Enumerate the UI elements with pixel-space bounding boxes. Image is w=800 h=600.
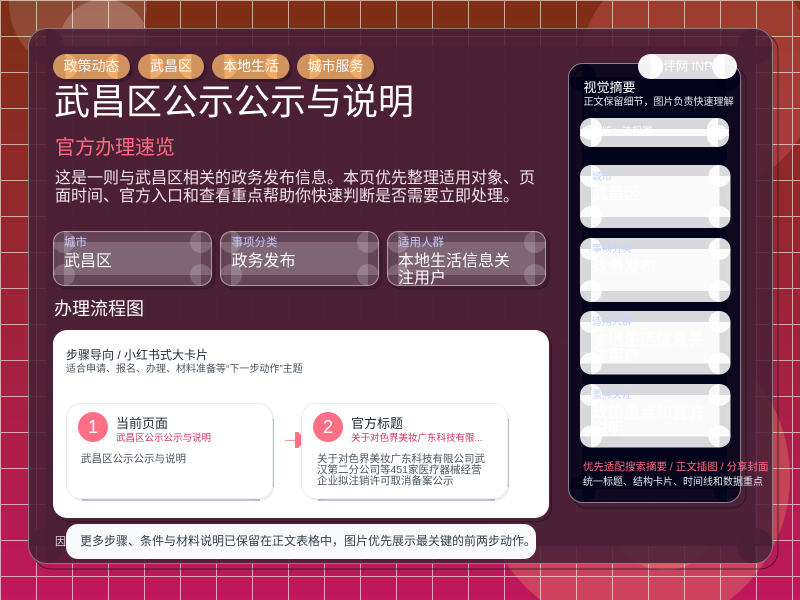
step card 1: 武昌区公示公示与说明 <box>116 432 211 444</box>
side footer accent: 优先适配搜索摘要 / 正文插图 / 分享封面 <box>583 460 769 473</box>
step card 2: 关于对色界美妆广东科技有限公司武 <box>317 452 485 465</box>
step card 1: 当前页面 <box>116 416 168 431</box>
arrow between steps <box>285 432 302 448</box>
side card: 适用人群: 适用人群 <box>592 315 632 328</box>
metric card: 事项分类: 政务发布 <box>232 252 296 270</box>
title: 武昌区公示公示与说明 <box>54 81 414 122</box>
side panel <box>568 63 769 508</box>
side card: 城市: 武昌区 <box>592 185 640 203</box>
note pill: 更多步骤、条件与材料说明已保留在正文表格中，图片优先展示最关键的前两步动作。 <box>80 533 536 548</box>
side card: 事项分类: 政务发布 <box>592 258 656 276</box>
metric card: 事项分类 <box>220 231 382 289</box>
tag: 政策动态: 政策动态 <box>64 58 120 74</box>
intro text <box>55 169 535 205</box>
step card 2 <box>302 404 509 501</box>
step number 2 <box>313 412 343 442</box>
side card: 重点关注: 说明 <box>592 420 624 438</box>
metric card: 适用人群: 注用户 <box>398 269 446 287</box>
side card: template <box>580 118 729 147</box>
metric card: 事项分类: 事项分类 <box>232 235 278 249</box>
metric card: 适用人群: 适用人群 <box>398 235 444 249</box>
metric card: 适用人群: 本地生活信息关 <box>398 252 510 270</box>
step card 2: 官方标题 <box>351 416 403 431</box>
tag: 本地生活: 本地生活 <box>223 58 279 74</box>
step number 2: 2 <box>323 417 333 437</box>
tag: 武昌区 <box>138 54 207 82</box>
tag: 城市服务: 城市服务 <box>308 58 364 74</box>
source pill <box>638 54 737 79</box>
side card: 城市: 城市 <box>592 170 612 183</box>
tags row <box>53 54 377 82</box>
side card: 适用人群: 本地生活信息关 <box>592 331 704 349</box>
step number 1: 1 <box>88 417 98 437</box>
side card: 重点关注 <box>580 384 730 448</box>
side card: template: 模版：流程图 <box>592 125 652 138</box>
flow panel <box>53 330 552 522</box>
metric card: 城市: 武昌区 <box>64 252 112 270</box>
intro text: 面时间、官方入口和查看重点帮助你快速判断是否需要立即处理。 <box>55 187 519 205</box>
side footer text: 统一标题、结构卡片、时间线和数据重点 <box>583 475 763 488</box>
subtitle: 官方办理速览 <box>55 136 175 159</box>
side card: 重点关注: 重点关注 <box>592 388 632 401</box>
side card: 适用人群: 注用户 <box>592 347 640 365</box>
step card 1: 武昌区公示公示与说明 <box>81 452 186 465</box>
side description: 正文保留细节，图片负责快速理解 <box>584 95 734 108</box>
step card 2: 汉第二分公司等451家医疗器械经营 <box>317 463 482 476</box>
step card 2: 关于对色界美妆广东科技有限... <box>351 432 482 444</box>
side card: 事项分类: 事项分类 <box>592 242 632 255</box>
flow heading: 办理流程图 <box>54 299 144 319</box>
side card: 重点关注: 政策重点和官方 <box>592 404 704 422</box>
metric card: 城市: 城市 <box>64 235 87 249</box>
flow panel heading: 步骤导向 / 小红书式大卡片 <box>66 347 208 362</box>
metric cards <box>53 231 549 289</box>
source pill: 点评网 INPIX <box>651 60 725 74</box>
note pill <box>66 524 536 559</box>
tag: 城市服务 <box>297 54 377 82</box>
intro text: 这是一则与武昌区相关的政务发布信息。本页优先整理适用对象、页 <box>55 169 535 187</box>
step card 2: 企业拟注销许可取消备案公示 <box>317 474 454 487</box>
side card: 适用人群 <box>580 311 730 374</box>
side card: 事项分类 <box>580 238 730 302</box>
step number 1 <box>78 412 108 442</box>
step card 1 <box>66 404 274 501</box>
side card: 城市 <box>580 165 730 228</box>
tag: 政策动态 <box>53 54 133 82</box>
tag: 武昌区: 武昌区 <box>150 58 192 74</box>
side heading: 视觉摘要 <box>584 80 636 95</box>
tag: 本地生活 <box>212 54 292 82</box>
metric card: 城市 <box>53 231 215 289</box>
hidden footnote start: 因 <box>55 535 66 548</box>
flow panel description: 适合申请、报名、办理、材料准备等“下一步动作”主题 <box>66 362 303 375</box>
metric card: 适用人群 <box>387 231 549 289</box>
